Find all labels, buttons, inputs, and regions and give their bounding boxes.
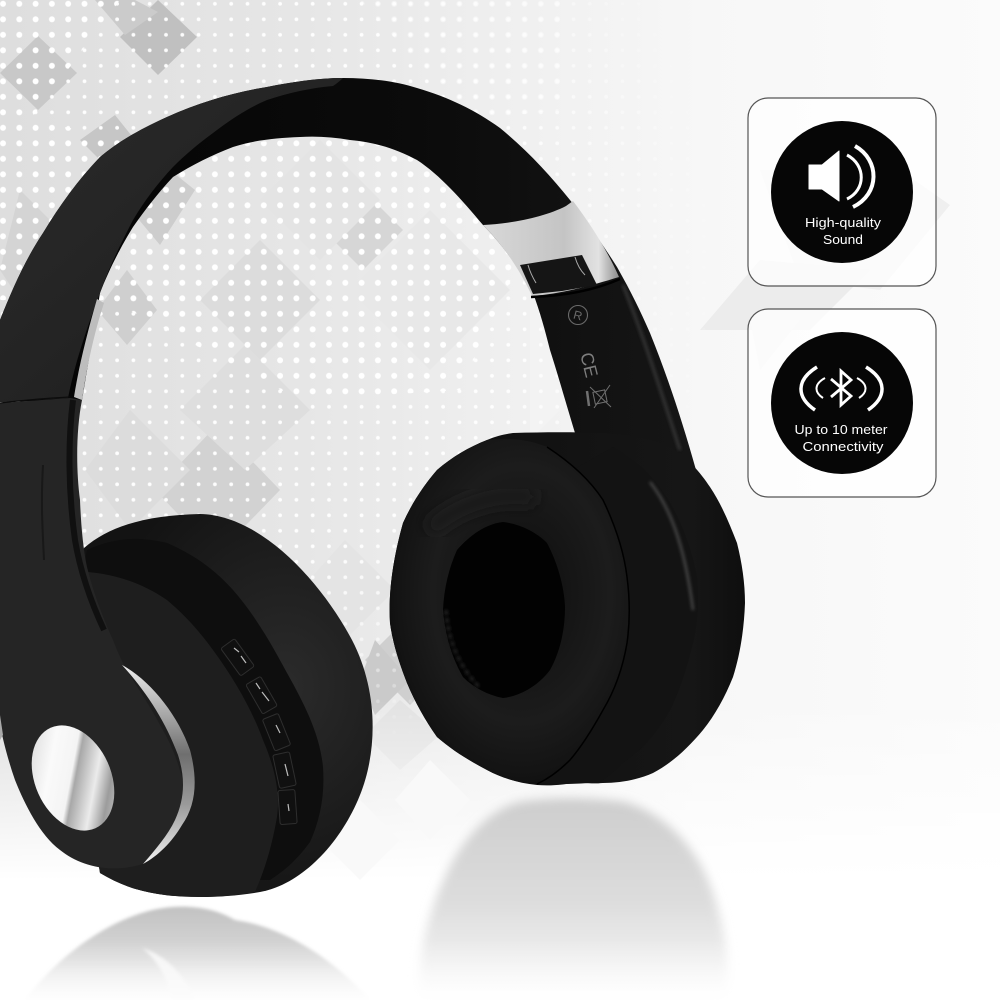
left ear cup — [60, 514, 373, 897]
left edge silver sliver — [0, 715, 3, 740]
background: grey diamonds and halftone dots — [0, 0, 950, 836]
right ear pad — [390, 439, 629, 784]
black circle — [771, 332, 913, 474]
hinge slot highlights — [528, 257, 585, 283]
right ear cup — [390, 432, 745, 785]
arm seam line — [0, 397, 70, 403]
label: Up to 10 meter Connectivity: Up to 10 meter — [794, 422, 888, 437]
headband front surface — [0, 78, 343, 868]
pad sheen — [430, 496, 535, 530]
left arm — [0, 398, 186, 868]
lower band seam — [531, 279, 620, 297]
black circle — [771, 121, 913, 263]
silver disc — [16, 712, 130, 844]
soft right-side facets — [530, 170, 950, 440]
pad seam — [537, 447, 629, 784]
reflection: left cup — [25, 907, 370, 1000]
registered mark — [568, 306, 588, 324]
label: High-quality Sound: Sound — [823, 232, 863, 247]
recycling bin mark — [587, 385, 611, 408]
right cup shell — [390, 432, 745, 785]
arm seam shading — [42, 465, 44, 560]
icon: bluetooth with signal waves — [801, 367, 882, 410]
reflection: soft fade — [0, 940, 1000, 1000]
hinge slot — [520, 255, 597, 294]
label: Up to 10 meter Connectivity — [794, 422, 888, 454]
registered letter: R — [572, 308, 584, 323]
faint diamonds on the lower band — [320, 760, 470, 880]
left hinge silver strip — [74, 299, 104, 400]
panel: up to 10 meter connectivity — [748, 309, 936, 497]
icon: speaker — [809, 146, 874, 207]
headphones — [0, 78, 745, 897]
control buttons — [221, 639, 297, 825]
highlight along right arm — [623, 285, 680, 450]
left cup ring with seam — [60, 539, 323, 880]
silver crescent — [122, 665, 195, 864]
arm inner dark edge — [69, 400, 104, 630]
reflection: right cup — [420, 798, 727, 1000]
label: Up to 10 meter Connectivity: Connectivity — [802, 439, 884, 454]
right hinge silver slider — [483, 201, 619, 296]
left cup back leather — [70, 572, 278, 897]
second cushion section — [520, 447, 698, 784]
button icons — [234, 648, 289, 811]
cushion highlight seam — [650, 482, 693, 610]
headband underside and right arm — [0, 78, 696, 470]
CE mark: CE — [576, 350, 602, 380]
hole wrinkles — [446, 610, 480, 688]
floor reflection of the headphones — [0, 798, 1000, 1000]
label: High-quality Sound — [805, 215, 882, 247]
panel: high-quality sound — [748, 98, 936, 286]
label: High-quality Sound: High-quality — [805, 215, 882, 230]
left ear pad — [60, 514, 373, 897]
ear hole — [443, 522, 565, 698]
